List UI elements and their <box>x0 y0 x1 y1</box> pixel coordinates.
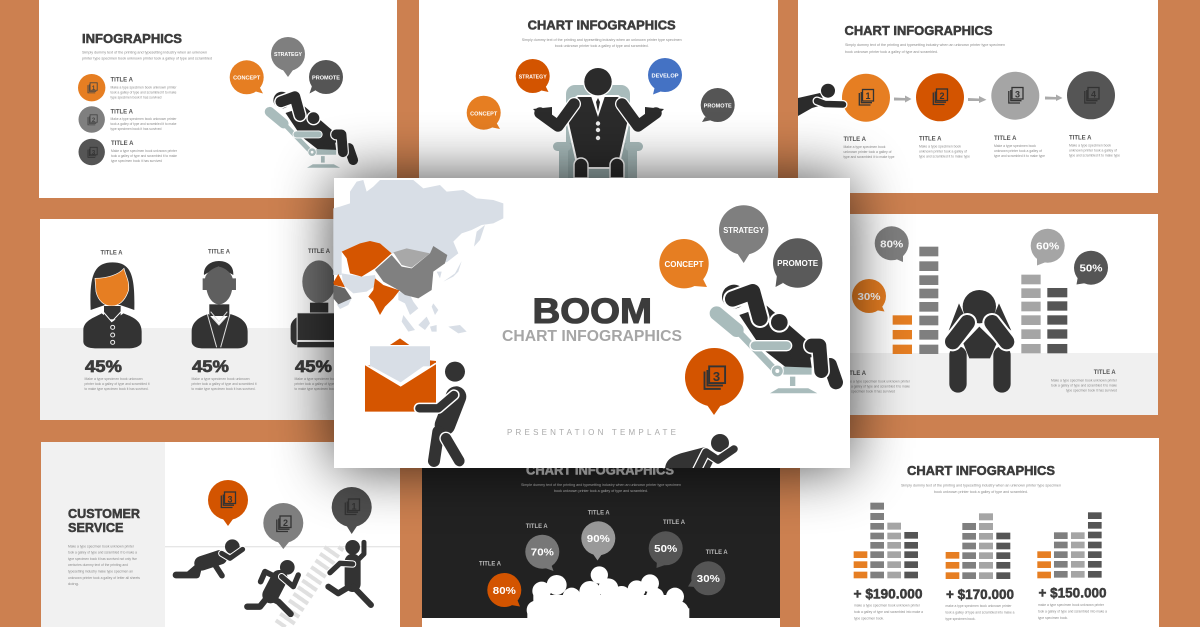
list item 1: 1 <box>92 86 96 92</box>
bar chart 3 <box>1037 512 1102 578</box>
arrow 2 <box>968 96 986 103</box>
panel: people percentages <box>40 219 400 420</box>
panel: chart infographics process <box>798 0 1158 193</box>
step 2: Make a type specimen book <box>919 144 961 148</box>
descriptions: Make a type specimen book unknown <box>84 377 142 381</box>
descriptions: printer took a galley of type and scrambled it <box>192 382 256 386</box>
description: doing. <box>68 582 79 586</box>
bubble: step 1 <box>332 487 372 534</box>
list item 1: type specimen book it has survived <box>110 96 162 100</box>
intro text: book unknown printer took a galley of type and scrambled. <box>555 44 649 48</box>
intro text <box>845 43 1005 54</box>
bubble: step 2: 2 <box>283 518 288 528</box>
title labels: TITLE A <box>100 250 123 256</box>
step 2 <box>916 73 970 158</box>
bubble: 60% <box>1031 229 1065 266</box>
speech bubble: concept <box>230 60 264 94</box>
descriptions: type specimen book. <box>1038 616 1068 620</box>
list item 2: Make a type specimen book unknown printer <box>110 117 177 121</box>
bubble: 90%: TITLE A <box>588 510 610 516</box>
descriptions: took a galley of type and scrambled into make a <box>854 610 924 614</box>
speech bubble: strategy <box>719 205 768 263</box>
panel: stressed person bars <box>798 214 1158 415</box>
panel: customer service <box>41 442 400 627</box>
speech bubble: concept: CONCEPT <box>470 112 498 118</box>
bubble: 70%: TITLE A <box>526 524 548 530</box>
bubble: 30% <box>688 550 728 595</box>
descriptions: printer took a galley of type and scrambled it <box>84 382 150 386</box>
description: Make a type specimen book unknown printer <box>68 544 135 548</box>
bubble: 50%: 50% <box>654 543 678 555</box>
step 4: Make a type specimen book <box>1069 144 1111 148</box>
arrow 1 <box>894 96 912 102</box>
asia map <box>333 180 503 333</box>
panel: chart infographics person in chair <box>419 0 778 178</box>
intro text: Simple dummy text of the printing and typesetting industry when an unknown printer type specimen <box>521 483 681 487</box>
values: + $190.000 <box>854 586 922 602</box>
white cloud <box>527 566 689 625</box>
list item 3: TITLE A <box>111 141 134 147</box>
heading: CHART INFOGRAPHICS <box>844 24 992 38</box>
bubble: 70% <box>525 524 559 571</box>
descriptions: type specimen book. <box>854 616 884 620</box>
speech bubble: promote <box>701 88 735 122</box>
speech bubble: concept <box>659 239 709 288</box>
intro text: book unknown printer took a galley of type and scrambled. <box>554 489 648 493</box>
left caption: TITLE A <box>844 371 867 377</box>
figure: person lying at bottom <box>665 434 734 472</box>
bubble: 30% <box>852 279 886 313</box>
list item 1: TITLE A <box>110 78 134 84</box>
step 4: TITLE A <box>1069 136 1092 142</box>
step 2: unknown printer took a galley of <box>919 150 968 154</box>
intro text <box>901 484 1061 494</box>
intro text: book unknown printer took a galley of type and scrambled. <box>845 50 938 54</box>
person: woman <box>83 262 142 348</box>
step 1: unknown printer took a galley of <box>844 150 892 154</box>
step 2: 2 <box>939 91 945 101</box>
speech bubble: strategy <box>271 37 305 77</box>
descriptions: make a type specimen book unknown printer <box>1038 603 1105 607</box>
tagline: PRESENTATION TEMPLATE <box>507 428 676 437</box>
right caption: took a galley of type and scrambled it to make <box>1051 384 1117 388</box>
bubble: 70%: 70% <box>531 546 555 558</box>
bubble: 80%: TITLE A <box>479 562 502 568</box>
intro text: Simply dummy text of the printing and typesetting industry when an unknown printer type specimen <box>522 38 682 42</box>
speech bubble: promote <box>773 238 822 288</box>
intro text: Simply dummy text of the printing and typesetting industry when an unknown printer type specimen <box>901 484 1061 488</box>
bubble: 50%: TITLE A <box>663 520 686 526</box>
arrow 3 <box>1045 94 1062 101</box>
step 1: Make a type specimen book <box>844 145 886 149</box>
list item 3 <box>78 139 178 165</box>
list item 1: Make a type specimen book unknown printer <box>110 86 177 90</box>
step 2: TITLE A <box>919 136 942 142</box>
list item 2: took a galley of type and scrambled it to make <box>110 122 176 126</box>
values: + $150.000 <box>1038 586 1106 600</box>
envelope <box>365 338 436 412</box>
figure: reclining person <box>717 285 836 393</box>
list item 1: took a galley of type and scrambled it to make <box>110 90 176 94</box>
figure: crawling person <box>176 539 243 576</box>
intro text: Simply dummy text of the printing and typesetting industry when an unknown printer type specimen <box>845 43 1005 47</box>
speech bubble: promote: PROMOTE <box>704 104 732 110</box>
percentage values: 45% <box>295 358 332 376</box>
person: man <box>192 261 248 348</box>
heading: CHART INFOGRAPHICS <box>526 464 674 478</box>
bar chart <box>893 247 1067 354</box>
description: took a galley of type and scrambled it to make a <box>68 550 138 554</box>
step 3: unknown printer took a galley of <box>994 149 1043 153</box>
intro text: book unknown printer took a galley of type and scrambled. <box>934 490 1028 494</box>
bubble: step 1: 1 <box>351 502 357 512</box>
figure: person pushing circle <box>798 84 843 116</box>
list item 1 <box>78 74 177 101</box>
description: centuries dummy text of the printing and <box>68 563 128 567</box>
list item 2 <box>78 106 177 133</box>
bar chart 2 <box>946 513 1010 579</box>
bubble: 50%: 50% <box>1080 262 1103 274</box>
intro text: printer type specimen book unknown printer took a galley of type and scrambled <box>82 56 212 60</box>
left caption: took a galley of type and scrambled it to make <box>844 384 910 388</box>
step 4: unknown printer took a galley of <box>1069 148 1118 152</box>
descriptions: took a galley of type and scrambled into make a <box>946 610 1015 614</box>
descriptions: Make a type specimen book unknown <box>294 377 352 381</box>
descriptions: Make a type specimen book unknown <box>192 377 250 381</box>
person: laptop user <box>291 260 339 347</box>
list item 3: took a galley of type and scrambled it to make <box>111 154 177 158</box>
speech bubble: step 3: 3 <box>713 369 720 384</box>
speech bubble: concept: CONCEPT <box>664 260 704 269</box>
descriptions: took a galley of type and scrambled into make a <box>1038 610 1108 614</box>
figure: stressed person <box>949 290 1011 393</box>
percentage values: 45% <box>85 358 122 376</box>
description: unknown printer took a galley of letter all sheets <box>68 576 140 580</box>
title labels: TITLE A <box>308 249 331 255</box>
bubble: 50% <box>649 520 686 568</box>
left caption <box>844 371 911 394</box>
bubble: 80% <box>479 562 521 607</box>
descriptions: make a type specimen book unknown printer <box>946 604 1012 608</box>
descriptions: to make type specimen book it has survived. <box>294 387 358 391</box>
title labels <box>100 249 331 256</box>
subtitle: CHART INFOGRAPHICS <box>502 328 682 345</box>
list item 3: type specimen book it has survived <box>111 159 162 163</box>
bubble: 30%: 30% <box>858 291 881 303</box>
description: typesetting industry make type specimen an <box>68 570 133 574</box>
bubble: step 3: 3 <box>227 494 233 504</box>
panel: central title card <box>333 178 850 472</box>
figure: person carrying envelope <box>419 362 465 461</box>
step 3: Make a type specimen book <box>994 144 1036 148</box>
speech bubble: step 3 <box>685 348 744 415</box>
speech bubble: develop <box>648 58 682 94</box>
right caption <box>1051 370 1118 392</box>
bubble: step 2 <box>263 503 303 549</box>
right caption: type specimen book it has survived <box>1066 388 1117 392</box>
speech bubble: strategy: STRATEGY <box>274 52 302 58</box>
step 4 <box>1067 71 1120 158</box>
list item 2: type specimen book it has survived <box>110 127 162 131</box>
step 4: type and scrambled it to make type <box>1069 154 1120 158</box>
step 3 <box>991 72 1045 158</box>
central card shadow <box>334 178 850 468</box>
step 1: type and scrambled it to make type <box>844 155 894 159</box>
bubble: 90% <box>581 510 615 560</box>
step 1 <box>842 74 894 159</box>
bubble: 80%: 80% <box>880 238 904 250</box>
heading: SERVICE <box>68 521 124 535</box>
bubble: 90%: 90% <box>587 533 611 545</box>
left caption: Make a type specimen book unknown printer <box>844 380 911 384</box>
speech bubble: strategy: STRATEGY <box>723 226 765 235</box>
intro text <box>522 38 682 48</box>
list item 2: 2 <box>92 118 96 124</box>
bubble: step 3 <box>208 480 248 526</box>
figure: leading runner <box>328 540 371 605</box>
step 3: TITLE A <box>994 136 1017 142</box>
percentage values: 45% <box>192 358 229 376</box>
speech bubble: promote <box>309 60 343 94</box>
step 4: 4 <box>1091 90 1096 100</box>
description <box>68 544 140 586</box>
percentage values <box>85 358 332 376</box>
panel: dark percentages <box>422 440 780 627</box>
heading: CHART INFOGRAPHICS <box>528 18 676 32</box>
descriptions <box>84 377 360 391</box>
left caption: type specimen book it has survived <box>844 390 895 394</box>
descriptions: type specimen book. <box>946 617 976 621</box>
horizon line <box>165 546 400 548</box>
figure: seated man shrugging <box>533 67 664 178</box>
descriptions: printer took a galley of type and scrambled it <box>294 382 360 386</box>
step 1: TITLE A <box>844 137 867 143</box>
bubble: 80%: 80% <box>493 585 517 597</box>
step 2: type and scrambled it to make type <box>919 154 970 158</box>
descriptions: to make type specimen book it has survived. <box>192 387 256 391</box>
descriptions: make a type specimen book unknown printer <box>854 604 921 608</box>
heading: CHART INFOGRAPHICS <box>907 464 1055 478</box>
heading: INFOGRAPHICS <box>82 32 182 46</box>
figure: reclining person <box>270 92 353 168</box>
panel: chart infographics values <box>800 438 1159 627</box>
right caption: Make a type specimen book unknown printer <box>1051 378 1118 382</box>
checkered track <box>275 547 342 627</box>
title: BOOM: BOOM <box>532 292 652 331</box>
bubble: 80% <box>875 226 909 262</box>
speech bubble: promote: PROMOTE <box>312 76 340 82</box>
speech bubble: strategy <box>516 59 550 93</box>
figure: running person <box>247 560 298 614</box>
heading: CUSTOMER <box>68 507 140 521</box>
intro text <box>82 50 212 60</box>
intro text <box>521 483 681 493</box>
speech bubble: concept: CONCEPT <box>233 76 261 82</box>
description: type specimen book it has survived not only five <box>68 557 137 561</box>
bar chart 1 <box>854 503 918 578</box>
right caption: TITLE A <box>1094 370 1116 376</box>
speech bubble: promote: PROMOTE <box>777 259 819 268</box>
panel: infographics list <box>39 0 397 198</box>
list item 2: TITLE A <box>110 110 134 116</box>
values: + $170.000 <box>946 587 1014 602</box>
bubble: 50% <box>1074 251 1108 285</box>
speech bubble: develop: DEVELOP <box>652 74 679 80</box>
step 3: type and scrambled it to make type <box>994 154 1045 158</box>
list item 3: 3 <box>92 150 96 156</box>
title labels: TITLE A <box>208 250 231 256</box>
speech bubble: concept <box>467 96 501 130</box>
speech bubble: strategy: STRATEGY <box>519 74 547 80</box>
descriptions: to make type specimen book it has survived. <box>84 387 148 391</box>
intro text: Simply dummy text of the printing and typesetting industry when an unknown <box>82 50 207 54</box>
descriptions <box>854 603 1108 621</box>
step 3: 3 <box>1015 90 1020 100</box>
bubble: 60%: 60% <box>1036 240 1060 252</box>
bubble: 30%: TITLE A <box>706 550 728 556</box>
list item 3: Make a type specimen book unknown printer <box>111 149 178 153</box>
heading <box>68 507 140 535</box>
values <box>854 586 1106 602</box>
bubble: 30%: 30% <box>697 573 721 585</box>
step 1: 1 <box>865 91 871 101</box>
